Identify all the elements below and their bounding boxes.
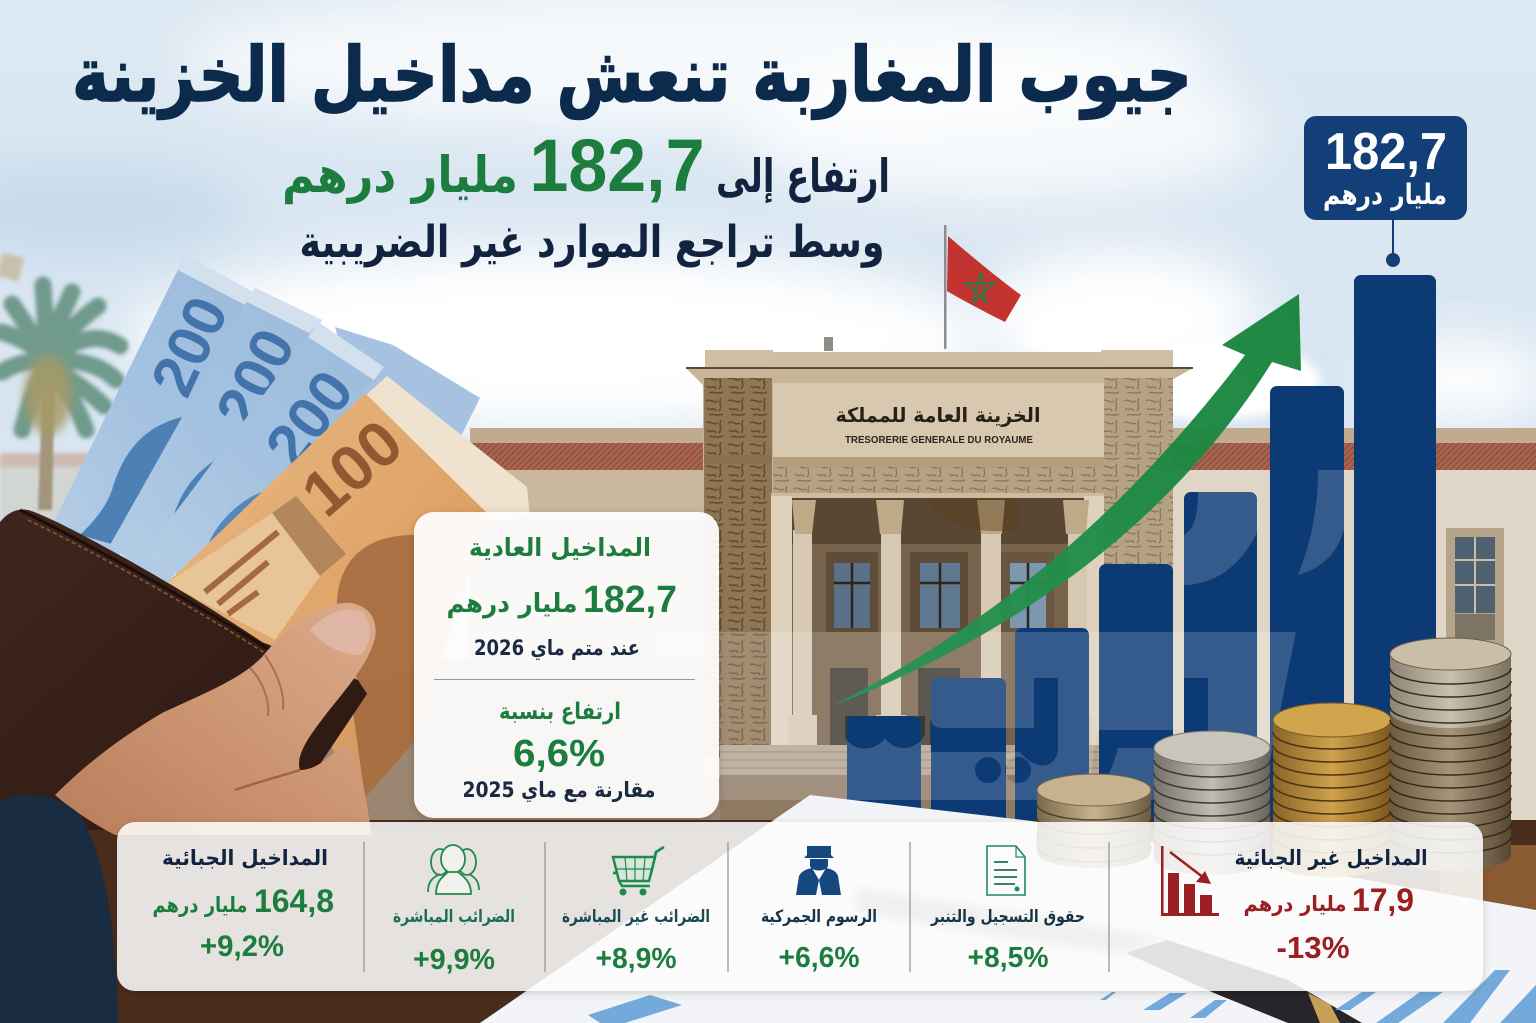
icon: shopping cart <box>613 847 664 896</box>
blue note 1: 200 <box>138 287 241 406</box>
desk and documents <box>0 795 1536 1023</box>
subtitle line 1: ارتفاع إلى <box>716 149 890 204</box>
building: left wing <box>280 428 730 830</box>
block: tax revenues: مليار درهم <box>152 893 248 917</box>
orange note 100: 100 <box>288 406 416 530</box>
value: 182,7 billion dirhams <box>446 579 677 621</box>
block: indirect taxes <box>562 847 710 975</box>
watermark tint <box>925 498 1018 531</box>
value: 6,6%: 6,6% <box>513 733 605 775</box>
blue note 1 <box>50 255 253 560</box>
block: registration and stamp duties: +8,5% <box>968 942 1049 974</box>
bar chart <box>847 275 1436 838</box>
subtitle line 1: 182,7 <box>530 124 704 207</box>
steps <box>720 745 1100 775</box>
subtitle line 1 <box>282 124 890 207</box>
block: indirect taxes: +8,9% <box>596 943 677 975</box>
block: non-tax revenues: مليار درهم <box>1244 892 1346 916</box>
block: tax revenues: +9,2% <box>200 930 284 963</box>
coin stack 3 <box>1273 703 1391 877</box>
building sign: Arabic: الخزينة العامة للمملكة <box>836 403 1040 427</box>
blue note 3: 200 <box>253 358 366 478</box>
block: direct taxes: +9,9% <box>413 944 495 976</box>
blue note 2: 200 <box>203 318 308 438</box>
hand holding wallet <box>55 603 376 835</box>
block: registration and stamp duties <box>930 846 1085 974</box>
block: indirect taxes: الضرائب غير المباشرة <box>562 907 710 927</box>
icon: people <box>428 845 479 894</box>
block: customs duties: +6,6% <box>778 942 860 974</box>
background: palm tree and distant houses <box>0 253 120 530</box>
value: 182,7 billion dirhams: مليار درهم <box>446 589 578 619</box>
block: non-tax revenues: -13% <box>1276 930 1350 965</box>
label: increase rate: ارتفاع بنسبة <box>499 699 621 725</box>
comparison note: مقارنة مع ماي 2025 <box>462 778 656 803</box>
icon: declining chart <box>1161 846 1219 916</box>
callout: total value: 182,7 <box>1325 123 1447 181</box>
subtitle line 2: وسط تراجع الموارد غير الضريبية <box>300 217 884 268</box>
panel: revenue breakdown <box>117 822 1483 991</box>
callout: total value: مليار درهم <box>1323 178 1447 211</box>
blue note 3 <box>145 322 384 590</box>
rear cream note <box>365 376 530 520</box>
coin stack 2 <box>1154 731 1270 875</box>
block: registration and stamp duties: حقوق التسجيل والتنبر <box>930 907 1085 927</box>
blue note 2 <box>110 288 322 590</box>
block: direct taxes: الضرائب المباشرة <box>393 907 515 927</box>
panel: ordinary revenues <box>414 512 719 818</box>
columns <box>788 500 1092 747</box>
block: non-tax revenues <box>1161 846 1428 965</box>
block: direct taxes <box>393 845 515 976</box>
sweater sleeve <box>0 795 118 1023</box>
building sign: French: TRESORERIE GENERALE DU ROYAUME <box>845 435 1033 446</box>
icon: customs officer <box>796 846 841 895</box>
watermark overlay <box>660 470 1344 800</box>
block: tax revenues <box>152 846 334 963</box>
orange note 100 <box>167 393 489 798</box>
paper chart strips <box>588 970 1536 1023</box>
building: right wing <box>1170 428 1536 820</box>
coin stack 1 <box>1037 774 1151 868</box>
block: customs duties: الرسوم الجمركية <box>761 907 877 927</box>
flag of Morocco <box>944 225 1021 349</box>
banknotes <box>50 255 530 798</box>
block: non-tax revenues: المداخيل غير الجبائية <box>1234 846 1428 870</box>
block: tax revenues: 164,8 <box>254 883 334 919</box>
leather wallet <box>0 510 367 830</box>
callout: total value <box>1304 116 1467 267</box>
block: tax revenues: المداخيل الجبائية <box>162 846 328 870</box>
date note: عند متم ماي 2026 <box>474 636 640 661</box>
growth arrow <box>832 294 1301 706</box>
building: central portico <box>686 337 1193 825</box>
coin stacks <box>1037 638 1511 877</box>
block: customs duties <box>761 846 877 974</box>
subtitle line 1: مليار درهم <box>282 146 518 204</box>
icon: document <box>987 846 1025 895</box>
rear blue note edge <box>335 327 480 436</box>
coin stack 4 <box>1390 638 1511 871</box>
block: non-tax revenues: 17,9 <box>1352 882 1414 918</box>
value: 182,7 billion dirhams: 182,7 <box>583 579 677 621</box>
windows <box>826 552 1054 745</box>
heading: ordinary revenues: المداخيل العادية <box>469 533 651 562</box>
title: جيوب المغاربة تنعش مداخيل الخزينة <box>72 30 1192 120</box>
